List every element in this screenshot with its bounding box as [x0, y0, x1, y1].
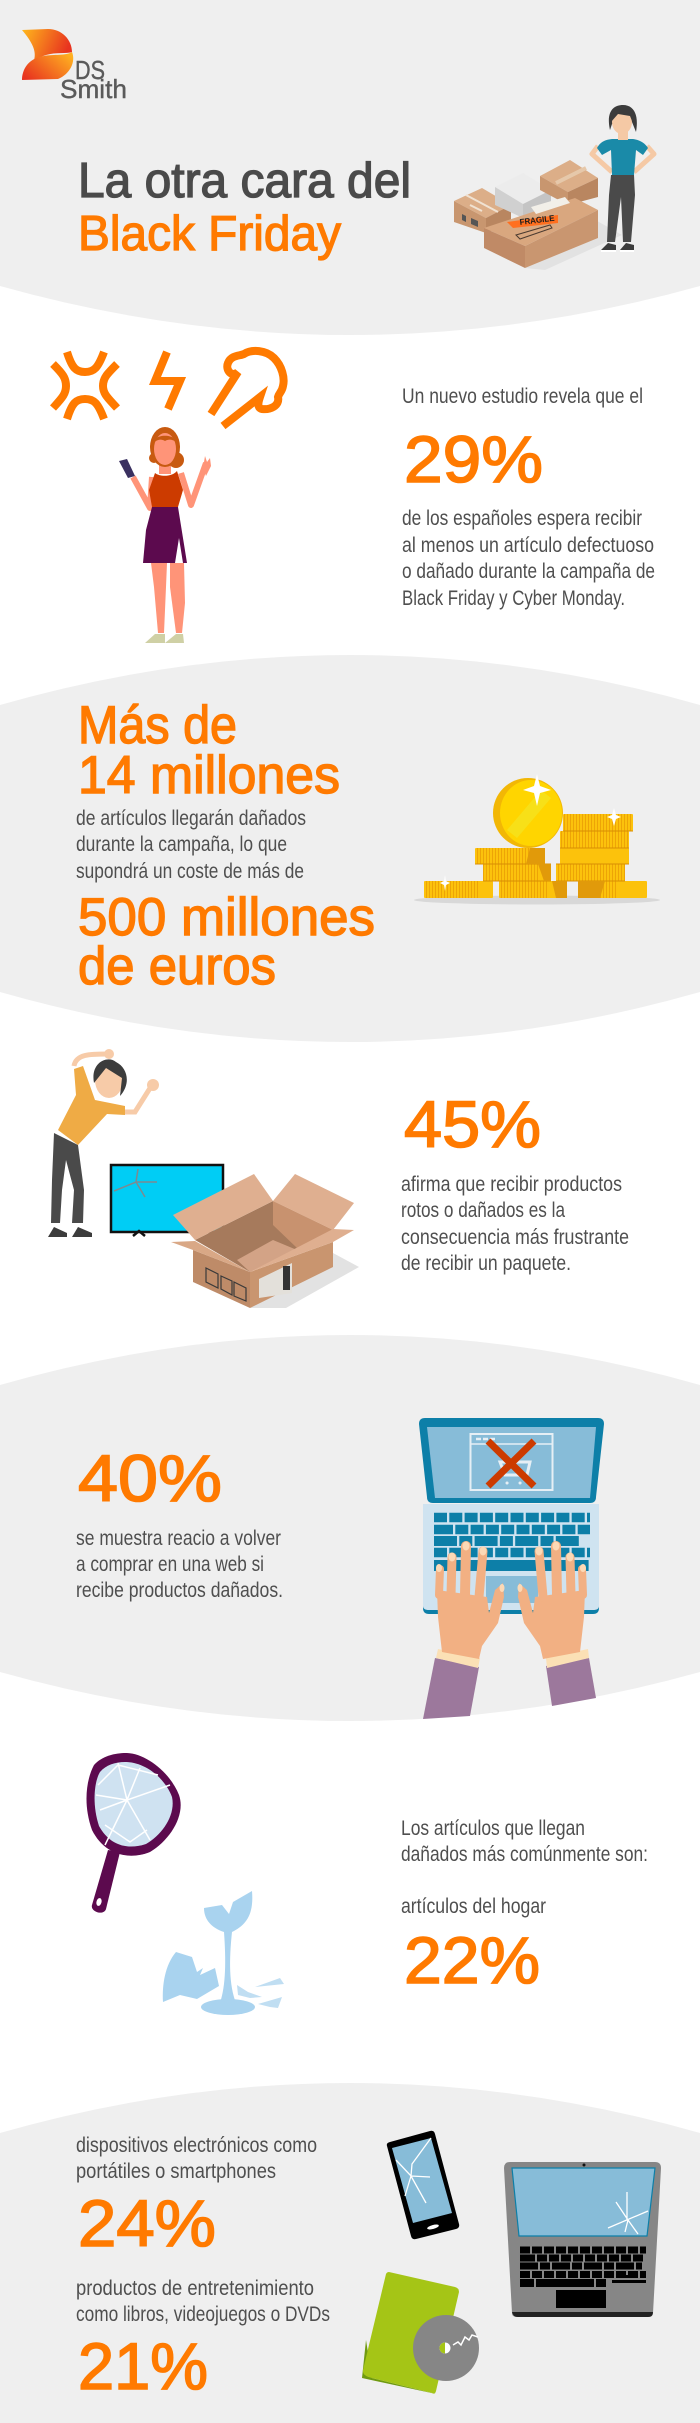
icon: anger mark [53, 352, 117, 419]
text: 45% description: rotos o dañados es la [401, 1198, 565, 1222]
stat: 29%: 29% [404, 422, 543, 496]
illustration: frustrated man [48, 1049, 159, 1237]
illustration: cracked mirror [86, 1753, 181, 1913]
stat lead text: artículos dañados: dañados más comúnmente son: [401, 1842, 648, 1866]
label: fragile tape [507, 213, 558, 228]
text: 40% description: recibe productos dañados. [76, 1578, 283, 1602]
title: Black Friday [78, 207, 341, 261]
icon: steam cloud [211, 351, 284, 426]
text: productos de entretenimiento [76, 2276, 330, 2326]
text: 40% description: a comprar en una web si [76, 1552, 264, 1576]
logo: DS Smith [22, 29, 127, 104]
illustration: stack of parcels [454, 160, 622, 270]
illustration: gold coins [414, 774, 660, 904]
text: 40% description [76, 1526, 283, 1602]
label: fragile tape: FRAGILE [519, 213, 555, 227]
stat lead text: artículos dañados [401, 1816, 648, 1866]
text: productos de entretenimiento: como libros, videojuegos o DVDs [76, 2302, 330, 2326]
heading: 500 millones de euros: de euros [78, 937, 276, 996]
text: dispositivos electrónicos [76, 2133, 317, 2183]
text: artículos del hogar: artículos del hogar [401, 1894, 546, 1918]
title: La otra cara del [78, 154, 411, 208]
text: productos de entretenimiento: productos de entretenimiento [76, 2276, 314, 2300]
stat: 21%: 21% [78, 2329, 208, 2403]
title [78, 154, 411, 261]
text: 40% description: se muestra reacio a volver [76, 1526, 281, 1550]
text: 29% description: al menos un artículo defectuoso [402, 533, 654, 557]
logo: DS Smith: DS [75, 55, 105, 85]
text: 45% description: consecuencia más frustrante [401, 1225, 629, 1249]
text: 29% description: Black Friday y Cyber Monday. [402, 586, 625, 610]
illustration: broken laptop [504, 2162, 661, 2317]
text: dispositivos electrónicos: dispositivos electrónicos como [76, 2133, 317, 2157]
illustration: man with hands on hips [592, 105, 654, 252]
illustration: laptop with hands [419, 1418, 604, 1719]
illustration: woman with phone [119, 427, 211, 643]
illustration: broken smartphone [387, 2131, 459, 2239]
stat: 45%: 45% [404, 1087, 541, 1161]
illustration: book with broken disc [362, 2272, 479, 2394]
text: 45% description: de recibir un paquete. [401, 1251, 571, 1275]
stat: 22%: 22% [404, 1923, 540, 1997]
text: artículos dañados: supondrá un coste de más de [76, 859, 304, 883]
left hand and sleeve [423, 1542, 504, 1719]
illustration: broken TV [111, 1165, 223, 1236]
panel: 14 millones band [0, 655, 700, 1042]
icon: lightning [155, 352, 180, 409]
heading: más de 14 millones: Más de [78, 696, 237, 755]
logo: DS Smith: Smith [60, 74, 127, 104]
heading: más de 14 millones [78, 696, 340, 805]
illustration: open cardboard box [171, 1174, 359, 1308]
text: 45% description [401, 1172, 629, 1275]
text: artículos dañados: durante la campaña, lo que [76, 832, 287, 856]
heading: 500 millones de euros: 500 millones [78, 888, 375, 947]
text: 29% description [402, 506, 655, 610]
stat: 24%: 24% [78, 2186, 216, 2260]
text: intro: Un nuevo estudio revela que el [402, 384, 643, 408]
heading: 500 millones de euros [78, 888, 375, 996]
heading: más de 14 millones: 14 millones [78, 746, 340, 805]
text: 45% description: afirma que recibir productos [401, 1172, 622, 1196]
right hand and sleeve [518, 1542, 596, 1706]
panel: final band [0, 2083, 700, 2423]
illustration: broken wine glass [163, 1891, 284, 2015]
text: 29% description: de los españoles espera recibir [402, 506, 642, 530]
panel: header band [0, 0, 700, 335]
panel: 40% band [0, 1335, 700, 1721]
text: dispositivos electrónicos: portátiles o smartphones [76, 2159, 276, 2183]
stat lead text: artículos dañados: Los artículos que llegan [401, 1816, 585, 1840]
stat: 40%: 40% [78, 1441, 222, 1515]
text: artículos dañados: de artículos llegarán dañados [76, 806, 306, 830]
text: artículos dañados [76, 806, 306, 883]
